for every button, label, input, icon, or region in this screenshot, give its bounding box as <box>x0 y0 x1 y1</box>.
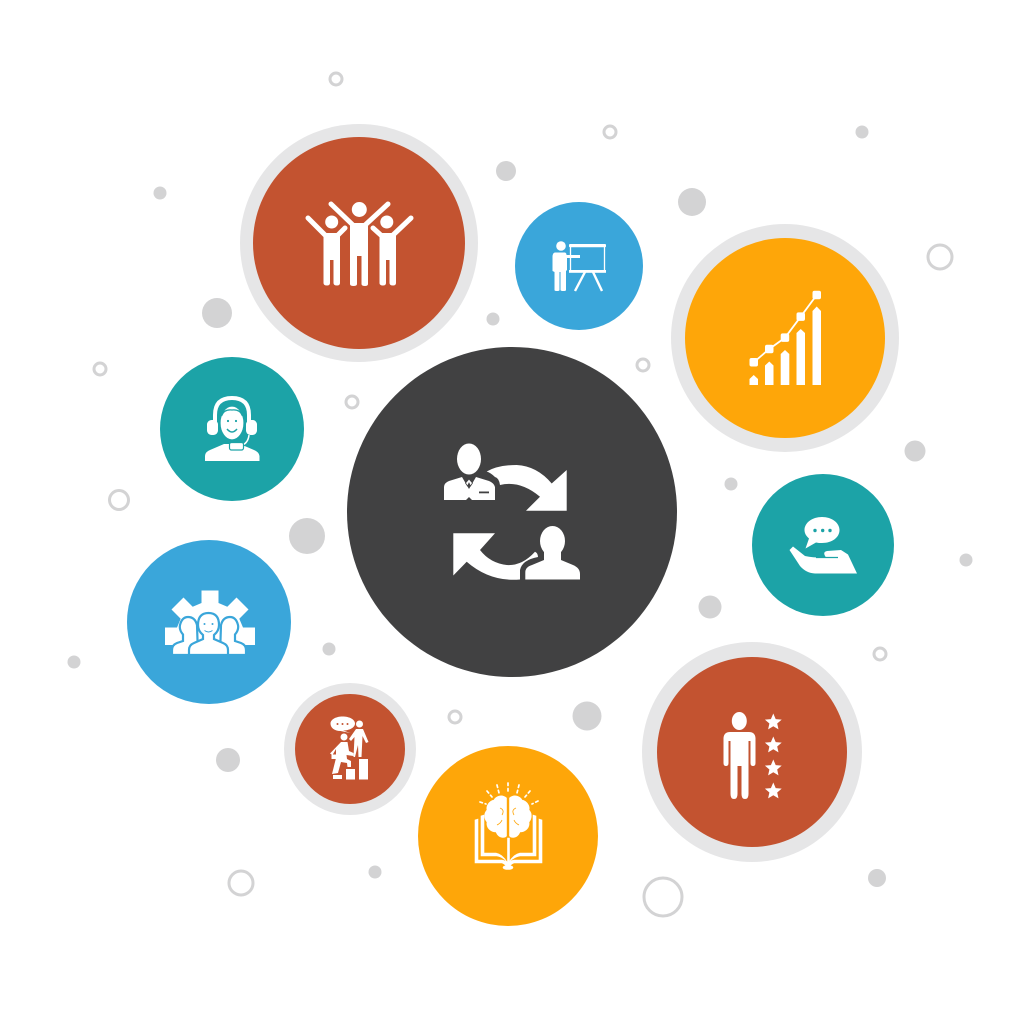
bubble: person with star rating <box>657 657 847 847</box>
bubble: brain over open book <box>418 746 598 926</box>
bubble: team gear <box>127 540 291 704</box>
bubble: speech over hand <box>752 474 894 616</box>
ring: growth bubble <box>671 224 899 452</box>
bubble: presentation <box>515 202 643 330</box>
bubble: customer support headset <box>160 357 304 501</box>
center bubble: employee exchange <box>347 347 677 677</box>
bubble: growth chart <box>685 238 885 438</box>
ring: rating bubble <box>642 642 862 862</box>
decorative hollow rings <box>94 73 952 916</box>
ring: mentoring bubble <box>284 683 416 815</box>
bubble: mentoring on steps <box>295 694 405 804</box>
bubble: team celebrating <box>253 137 465 349</box>
ring: team bubble <box>240 124 478 362</box>
decorative gray dots <box>68 126 972 887</box>
